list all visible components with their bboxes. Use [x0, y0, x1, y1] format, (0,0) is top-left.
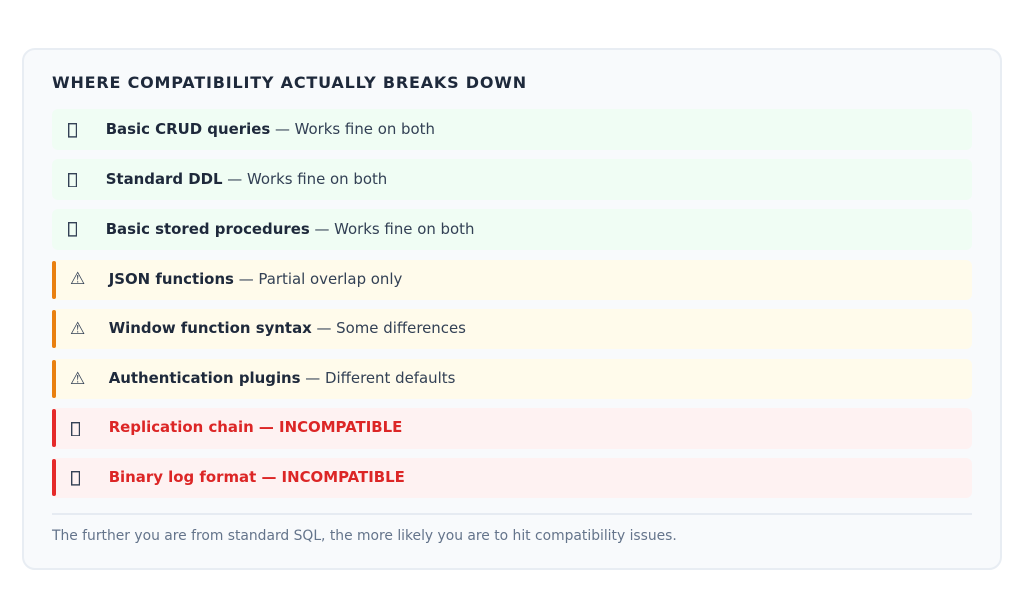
row: JSON functions: JSON functions — Partial overlap only [109, 270, 402, 288]
row: Replication chain [52, 408, 972, 448]
row: Window function syntax: Window function syntax — Some differences [109, 319, 466, 337]
row: Authentication plugins: ⚠ [70, 369, 85, 389]
row: Binary log format [52, 458, 972, 498]
row: Authentication plugins: Authentication plugins — Different defaults [109, 369, 455, 387]
footnote: The further you are from standard SQL, the more likely you are to hit compatibility issues. [52, 528, 677, 544]
row: Replication chain: Replication chain — INCOMPATIBLE [109, 418, 402, 436]
row: JSON functions: ⚠ [70, 269, 85, 289]
row: Basic CRUD queries [52, 109, 972, 150]
row: Basic stored procedures [52, 209, 972, 250]
row: Window function syntax: ⚠ [70, 319, 85, 339]
row: Window function syntax [52, 309, 972, 349]
row: Basic stored procedures: Basic stored procedures — Works fine on both [106, 220, 474, 238]
row: JSON functions [52, 260, 972, 300]
title: WHERE COMPATIBILITY ACTUALLY BREAKS DOWN [52, 73, 527, 92]
row: Standard DDL: Standard DDL — Works fine on both [106, 170, 387, 188]
row: Standard DDL [52, 159, 972, 200]
row: Authentication plugins [52, 359, 972, 399]
row: Binary log format: Binary log format — INCOMPATIBLE [109, 468, 405, 486]
row: Basic CRUD queries: Basic CRUD queries — Works fine on both [106, 120, 435, 138]
